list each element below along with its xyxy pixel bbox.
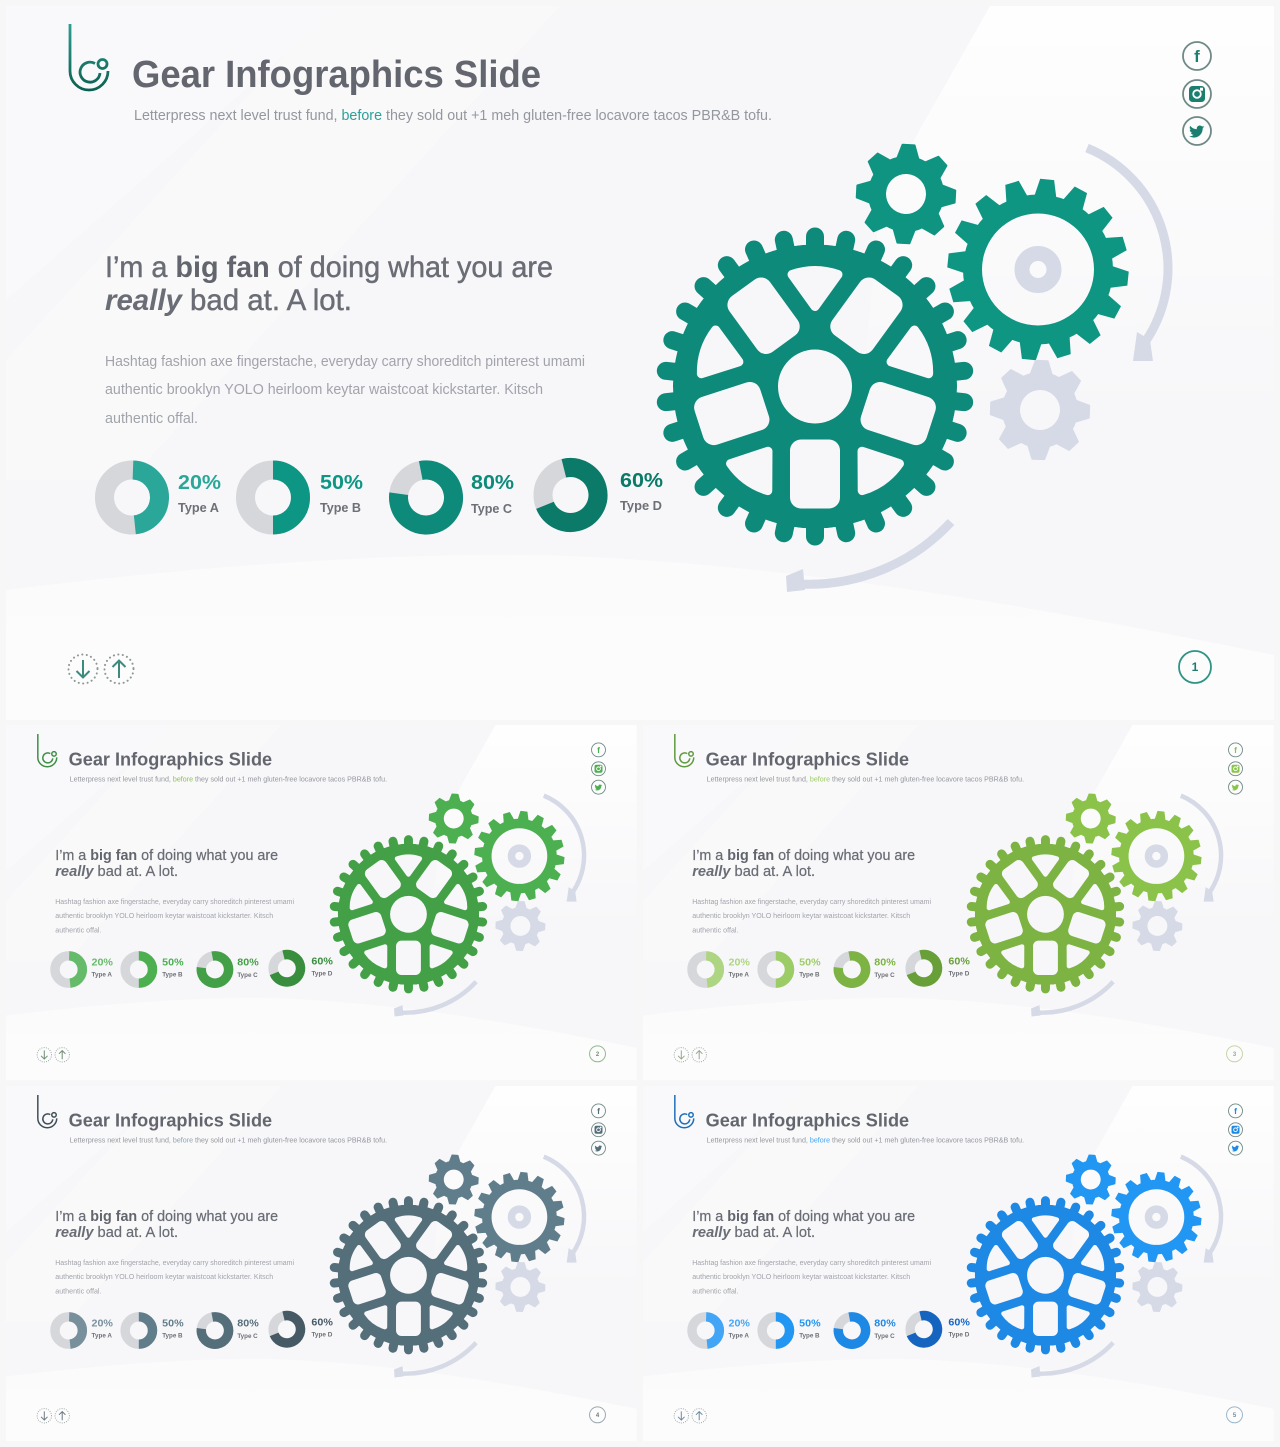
slide background bbox=[643, 725, 1274, 1080]
gear: large sprocket bbox=[629, 215, 1001, 558]
gear: large sprocket bbox=[316, 829, 501, 1000]
donut: Type C: 80% bbox=[237, 1318, 259, 1329]
donut: Type C: 80% bbox=[874, 957, 896, 968]
page number: 1 bbox=[1192, 660, 1199, 674]
donut: Type A bbox=[104, 469, 221, 526]
donut: Type A: Type A bbox=[729, 972, 749, 979]
donut: Type B bbox=[125, 1317, 184, 1344]
body paragraph: Hashtag fashion axe fingerstache, everyday carry shoreditch pinterest umami bbox=[105, 354, 585, 370]
heading: I’m a big fan of doing what you are bbox=[55, 1208, 278, 1225]
heading: I’m a big fan of doing what you are bbox=[692, 1208, 915, 1225]
page number bbox=[1179, 651, 1211, 683]
donut: Type B: Type B bbox=[799, 1333, 820, 1340]
donut: Type A: Type A bbox=[92, 1333, 112, 1340]
body paragraph bbox=[55, 1258, 294, 1295]
donut: Type D: Type D bbox=[948, 1332, 970, 1339]
subtitle: Letterpress next level trust fund, before they sold out +1 meh gluten-free locavore tacos PBR&B tofu. bbox=[70, 1136, 387, 1145]
donut: Type C: 80% bbox=[471, 472, 514, 494]
title: Gear Infographics Slide bbox=[69, 749, 272, 770]
donut: Type B: Type B bbox=[162, 972, 183, 979]
donut: Type D: 60% bbox=[311, 1317, 333, 1328]
gear: grey bbox=[989, 359, 1091, 461]
navigation arrows bbox=[674, 1409, 706, 1423]
gear: medium bbox=[467, 1165, 572, 1269]
body paragraph: authentic offal. bbox=[692, 1286, 739, 1295]
social icons bbox=[1229, 1104, 1242, 1155]
title: Gear Infographics Slide bbox=[69, 1110, 272, 1131]
body paragraph: Hashtag fashion axe fingerstache, everyday carry shoreditch pinterest umami bbox=[55, 1258, 294, 1267]
heading bbox=[55, 847, 278, 880]
gear: small bbox=[1065, 793, 1116, 844]
gear: small bbox=[855, 143, 957, 245]
slide background bbox=[6, 725, 637, 1080]
rotation arrows bbox=[394, 796, 584, 1017]
rotation arrows bbox=[1031, 796, 1221, 1017]
donut: Type A: 20% bbox=[92, 1318, 113, 1329]
body paragraph: Hashtag fashion axe fingerstache, everyday carry shoreditch pinterest umami bbox=[692, 897, 931, 906]
gear: grey bbox=[1132, 1262, 1183, 1312]
social icons bbox=[592, 1104, 605, 1155]
donut: Type B bbox=[246, 470, 363, 525]
gear: large sprocket bbox=[953, 1190, 1138, 1361]
body paragraph bbox=[105, 354, 585, 427]
body paragraph: authentic brooklyn YOLO heirloom keytar waistcoat kickstarter. Kitsch bbox=[55, 911, 273, 920]
gear: grey bbox=[1132, 901, 1183, 951]
body paragraph: authentic offal. bbox=[55, 925, 102, 934]
heading: really bad at. A lot. bbox=[692, 863, 815, 880]
title: Gear Infographics Slide bbox=[706, 749, 909, 770]
donut: Type D: 60% bbox=[311, 956, 333, 967]
donut: Type B: 50% bbox=[799, 1318, 821, 1329]
donut: Type D: 60% bbox=[948, 1317, 970, 1328]
donut: Type C: 80% bbox=[237, 957, 259, 968]
social icons bbox=[592, 743, 605, 794]
donut: Type B: 50% bbox=[162, 957, 184, 968]
donut: Type A: 20% bbox=[729, 1318, 750, 1329]
logo bbox=[70, 24, 108, 90]
heading: really bad at. A lot. bbox=[692, 1224, 815, 1241]
body paragraph bbox=[692, 1258, 931, 1295]
body paragraph: Hashtag fashion axe fingerstache, everyday carry shoreditch pinterest umami bbox=[55, 897, 294, 906]
donut: Type B: 50% bbox=[799, 957, 821, 968]
social icons: f bbox=[1234, 1106, 1237, 1116]
donut: Type D: 60% bbox=[948, 956, 970, 967]
slide background bbox=[6, 6, 1274, 720]
donut: Type C: Type C bbox=[471, 501, 513, 516]
donut: Type C: Type C bbox=[237, 1333, 258, 1340]
donut: Type D: Type D bbox=[620, 498, 662, 513]
donut: Type B: Type B bbox=[320, 500, 361, 515]
page number: 3 bbox=[1233, 1052, 1237, 1058]
body paragraph: authentic brooklyn YOLO heirloom keytar waistcoat kickstarter. Kitsch bbox=[105, 382, 543, 398]
navigation arrows bbox=[674, 1048, 706, 1062]
panel: slate slide bbox=[6, 1086, 637, 1441]
subtitle: Letterpress next level trust fund, before they sold out +1 meh gluten-free locavore tacos PBR&B tofu. bbox=[707, 1136, 1024, 1145]
donut: Type D bbox=[270, 1313, 333, 1346]
rotation arrows bbox=[394, 1157, 584, 1378]
donut: Type A: Type A bbox=[729, 1333, 749, 1340]
heading bbox=[105, 251, 553, 317]
body paragraph: authentic brooklyn YOLO heirloom keytar waistcoat kickstarter. Kitsch bbox=[692, 911, 910, 920]
gear: medium bbox=[467, 804, 572, 908]
donut: Type D: 60% bbox=[620, 470, 663, 492]
navigation arrows bbox=[68, 654, 134, 684]
heading bbox=[692, 1208, 915, 1241]
heading: I’m a big fan of doing what you are bbox=[692, 847, 915, 864]
rotation arrows bbox=[1031, 1157, 1221, 1378]
page number bbox=[590, 1407, 605, 1423]
donut: Type A: 20% bbox=[178, 472, 221, 494]
body paragraph bbox=[55, 897, 294, 934]
donut: Type C bbox=[836, 953, 896, 986]
rotation arrows bbox=[786, 148, 1168, 592]
body paragraph: authentic brooklyn YOLO heirloom keytar waistcoat kickstarter. Kitsch bbox=[692, 1272, 910, 1281]
logo bbox=[675, 734, 694, 767]
donut: Type C bbox=[199, 1314, 259, 1347]
slide background bbox=[643, 1086, 1274, 1441]
donut: Type C: Type C bbox=[874, 972, 895, 979]
gear: medium bbox=[1104, 804, 1209, 908]
body paragraph: Hashtag fashion axe fingerstache, everyday carry shoreditch pinterest umami bbox=[692, 1258, 931, 1267]
donut: Type C: 80% bbox=[874, 1318, 896, 1329]
social icons: f bbox=[1194, 47, 1200, 66]
heading: I’m a big fan of doing what you are bbox=[55, 847, 278, 864]
gear: medium bbox=[1104, 1165, 1209, 1269]
donut: Type C bbox=[394, 465, 514, 530]
gear: grey bbox=[495, 901, 546, 951]
gear: small bbox=[428, 1154, 479, 1205]
donut: Type B: Type B bbox=[799, 972, 820, 979]
gear: large sprocket bbox=[316, 1190, 501, 1361]
logo bbox=[675, 1095, 694, 1128]
donut: Type C bbox=[199, 953, 259, 986]
donut: Type A: Type A bbox=[178, 500, 220, 515]
donut: Type A bbox=[55, 1316, 113, 1345]
donut: Type D bbox=[907, 1313, 970, 1346]
body paragraph: authentic brooklyn YOLO heirloom keytar waistcoat kickstarter. Kitsch bbox=[55, 1272, 273, 1281]
donut: Type A: 20% bbox=[92, 957, 113, 968]
body paragraph: authentic offal. bbox=[55, 1286, 102, 1295]
donut: Type D bbox=[270, 952, 333, 985]
logo bbox=[38, 734, 57, 767]
page number: 5 bbox=[1233, 1413, 1237, 1419]
panel: green slide bbox=[6, 725, 637, 1080]
heading: really bad at. A lot. bbox=[55, 1224, 178, 1241]
social icons: f bbox=[597, 1106, 600, 1116]
page number: 2 bbox=[596, 1052, 600, 1058]
slide background bbox=[6, 1086, 637, 1441]
donut: Type C: Type C bbox=[874, 1333, 895, 1340]
donut: Type A bbox=[55, 955, 113, 984]
body paragraph: authentic offal. bbox=[692, 925, 739, 934]
gear: large sprocket bbox=[953, 829, 1138, 1000]
donut: Type B: 50% bbox=[162, 1318, 184, 1329]
gear: small bbox=[1065, 1154, 1116, 1205]
panel: blue slide bbox=[643, 1086, 1274, 1441]
heading: really bad at. A lot. bbox=[105, 284, 352, 317]
donut: Type D bbox=[907, 952, 970, 985]
page number: 4 bbox=[596, 1413, 600, 1419]
donut: Type A bbox=[692, 955, 750, 984]
social icons: f bbox=[597, 745, 600, 755]
navigation arrows bbox=[37, 1409, 69, 1423]
social icons bbox=[1229, 743, 1242, 794]
subtitle: Letterpress next level trust fund, before they sold out +1 meh gluten-free locavore tacos PBR&B tofu. bbox=[134, 108, 772, 124]
page number bbox=[1227, 1046, 1242, 1062]
donut: Type C bbox=[836, 1314, 896, 1347]
logo bbox=[38, 1095, 57, 1128]
subtitle: Letterpress next level trust fund, before they sold out +1 meh gluten-free locavore tacos PBR&B tofu. bbox=[70, 775, 387, 784]
social icons bbox=[1183, 42, 1211, 145]
donut: Type B: Type B bbox=[162, 1333, 183, 1340]
donut: Type A bbox=[692, 1316, 750, 1345]
donut: Type C: Type C bbox=[237, 972, 258, 979]
title: Gear Infographics Slide bbox=[132, 54, 541, 96]
donut: Type B bbox=[125, 956, 184, 983]
body paragraph bbox=[692, 897, 931, 934]
panel: main teal slide bbox=[6, 6, 1274, 720]
donut: Type A: 20% bbox=[729, 957, 750, 968]
navigation arrows bbox=[37, 1048, 69, 1062]
donut: Type A: Type A bbox=[92, 972, 112, 979]
donut: Type D: Type D bbox=[311, 971, 333, 978]
page number bbox=[590, 1046, 605, 1062]
gear: grey bbox=[495, 1262, 546, 1312]
body paragraph: authentic offal. bbox=[105, 411, 198, 427]
donut: Type B: 50% bbox=[320, 472, 363, 494]
title: Gear Infographics Slide bbox=[706, 1110, 909, 1131]
donut: Type D: Type D bbox=[311, 1332, 333, 1339]
heading bbox=[55, 1208, 278, 1241]
donut: Type D: Type D bbox=[948, 971, 970, 978]
heading: really bad at. A lot. bbox=[55, 863, 178, 880]
social icons: f bbox=[1234, 745, 1237, 755]
gear: medium bbox=[933, 164, 1143, 375]
gear: small bbox=[428, 793, 479, 844]
heading: I’m a big fan of doing what you are bbox=[105, 251, 553, 284]
page number bbox=[1227, 1407, 1242, 1423]
donut: Type D bbox=[537, 462, 663, 528]
subtitle: Letterpress next level trust fund, before they sold out +1 meh gluten-free locavore tacos PBR&B tofu. bbox=[707, 775, 1024, 784]
heading bbox=[692, 847, 915, 880]
panel: lime slide bbox=[643, 725, 1274, 1080]
donut: Type B bbox=[762, 1317, 821, 1344]
donut: Type B bbox=[762, 956, 821, 983]
